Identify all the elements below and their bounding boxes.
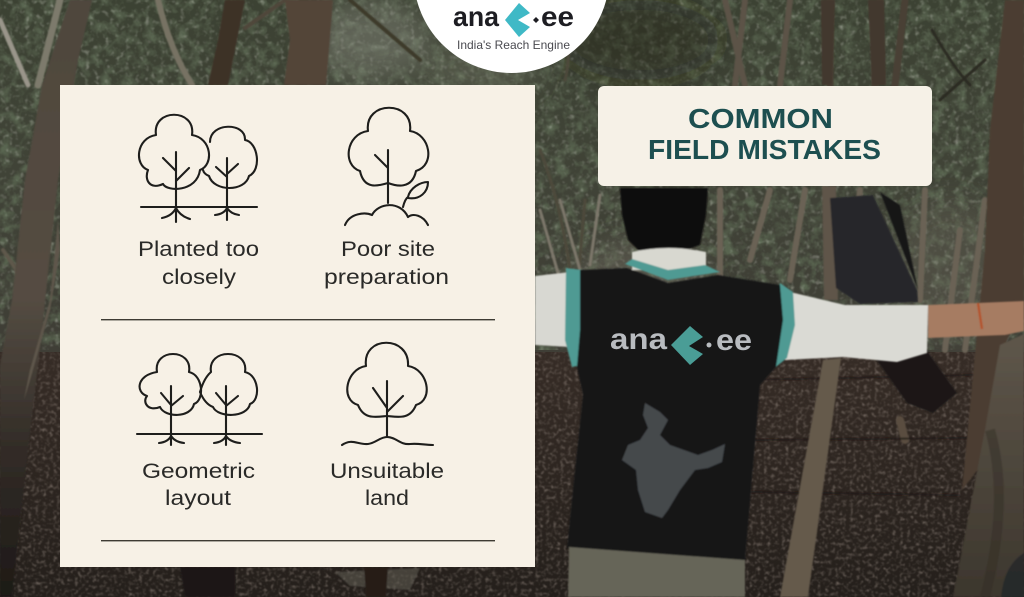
label: geometric layout: Geometric: [142, 459, 255, 483]
vest logo: ana: [610, 323, 667, 356]
vest body: [567, 268, 783, 560]
icon: poor site preparation: [345, 108, 428, 225]
logo wordmark: ee: [541, 1, 574, 32]
label: planted too closely: Planted too: [138, 237, 259, 261]
logo tagline: India's Reach Engine: [457, 38, 570, 52]
heading: FIELD MISTAKES: [648, 134, 881, 165]
collar: [632, 248, 706, 272]
label: unsuitable land: [330, 459, 444, 510]
logo wordmark: [453, 1, 574, 37]
icon: trees planted too closely: [139, 115, 257, 222]
panel: common mistakes list: [60, 85, 535, 567]
heading: COMMON: [688, 103, 833, 134]
vest logo: [610, 323, 752, 365]
sleeve left: [535, 272, 570, 347]
post: [780, 358, 841, 597]
teal armholes: [565, 268, 582, 367]
label: poor site preparation: [324, 237, 449, 289]
label: geometric layout: [142, 459, 255, 510]
head: [620, 188, 708, 252]
icon: geometric layout: [137, 354, 262, 445]
right upper trunks: [962, 0, 1024, 490]
label: geometric layout: layout: [165, 486, 231, 510]
label: poor site preparation: Poor site: [341, 237, 435, 261]
label: unsuitable land: land: [365, 486, 409, 510]
icon: unsuitable land: [342, 343, 433, 445]
label: planted too closely: closely: [162, 265, 236, 289]
label: poor site preparation: preparation: [324, 265, 449, 289]
divider bottom: [101, 540, 495, 541]
divider top: [101, 319, 495, 320]
person seen from behind wearing branded vest: [535, 188, 1024, 597]
label: unsuitable land: Unsuitable: [330, 459, 444, 483]
logo badge: [414, 0, 610, 73]
sleeve right: [785, 292, 928, 362]
label: planted too closely: [138, 237, 259, 289]
title card: [598, 86, 932, 186]
heading: [648, 103, 881, 165]
vest logo: ee: [716, 324, 752, 357]
hanging net cloth: [830, 195, 918, 304]
right foreground trunk: [953, 334, 1024, 597]
trousers: [568, 547, 745, 597]
logo wordmark: ana: [453, 1, 499, 32]
left trunks: [0, 0, 92, 597]
forearm: [928, 301, 1024, 338]
India map on vest: [622, 403, 725, 518]
